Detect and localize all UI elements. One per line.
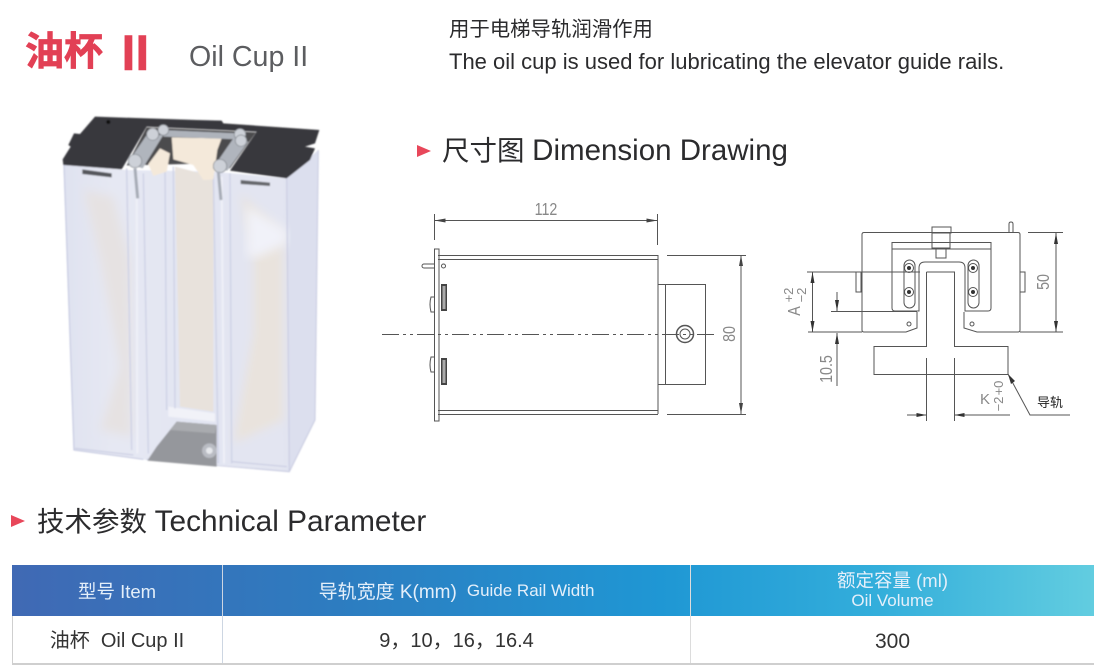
heading: technical parameter: 技术参数 Technical Parameter bbox=[37, 505, 426, 538]
cell: volume: 300 bbox=[875, 630, 910, 652]
title: Chinese: II bbox=[122, 25, 149, 81]
front view drawing: 导轨 bbox=[1037, 395, 1063, 410]
front view drawing: A bbox=[786, 306, 804, 316]
front view drawing: 10.5 bbox=[818, 355, 836, 383]
header: oil volume: 额定容量 (ml) bbox=[837, 570, 948, 590]
description bbox=[449, 18, 1004, 74]
front view drawing: −2 bbox=[794, 288, 809, 302]
cell: widths: 9，10，16，16.4 bbox=[379, 630, 534, 652]
parameter table bbox=[12, 565, 1094, 665]
front view drawing: −2 bbox=[991, 397, 1006, 411]
title: English: Oil Cup II bbox=[189, 41, 308, 73]
front view drawing: K bbox=[980, 391, 990, 408]
front view drawing: +2 bbox=[781, 288, 796, 302]
product photo: oil cup bbox=[62, 116, 320, 473]
header: guide rail width: 导轨宽度 K(mm) bbox=[319, 582, 457, 603]
header: guide rail width bbox=[319, 580, 594, 603]
side view drawing bbox=[382, 201, 746, 422]
title: Chinese bbox=[25, 25, 149, 81]
header: guide rail width: Guide Rail Width bbox=[467, 580, 594, 600]
cell: model: 油杯 Oil Cup II bbox=[50, 630, 184, 652]
header: oil volume: Oil Volume bbox=[851, 590, 934, 610]
side view drawing: 112 bbox=[535, 201, 557, 219]
description: 用于电梯导轨润滑作用 bbox=[449, 19, 653, 41]
header: oil volume bbox=[837, 570, 948, 610]
triangle marker: dimension drawing bbox=[417, 145, 431, 157]
column dividers bbox=[222, 565, 223, 663]
table header band bbox=[12, 565, 1094, 616]
heading: dimension drawing: 尺寸图 Dimension Drawing bbox=[442, 134, 788, 167]
title: Chinese: 油杯 bbox=[25, 31, 103, 74]
front view drawing: 50 bbox=[1035, 274, 1053, 290]
header: item: 型号 Item bbox=[78, 580, 156, 602]
front view drawing: +0 bbox=[991, 381, 1006, 395]
side view drawing: 80 bbox=[721, 326, 739, 342]
triangle marker: technical parameter bbox=[11, 515, 25, 527]
description: The oil cup is used for lubricating the elevator guide rails. bbox=[449, 49, 1004, 74]
front view drawing bbox=[781, 222, 1070, 421]
